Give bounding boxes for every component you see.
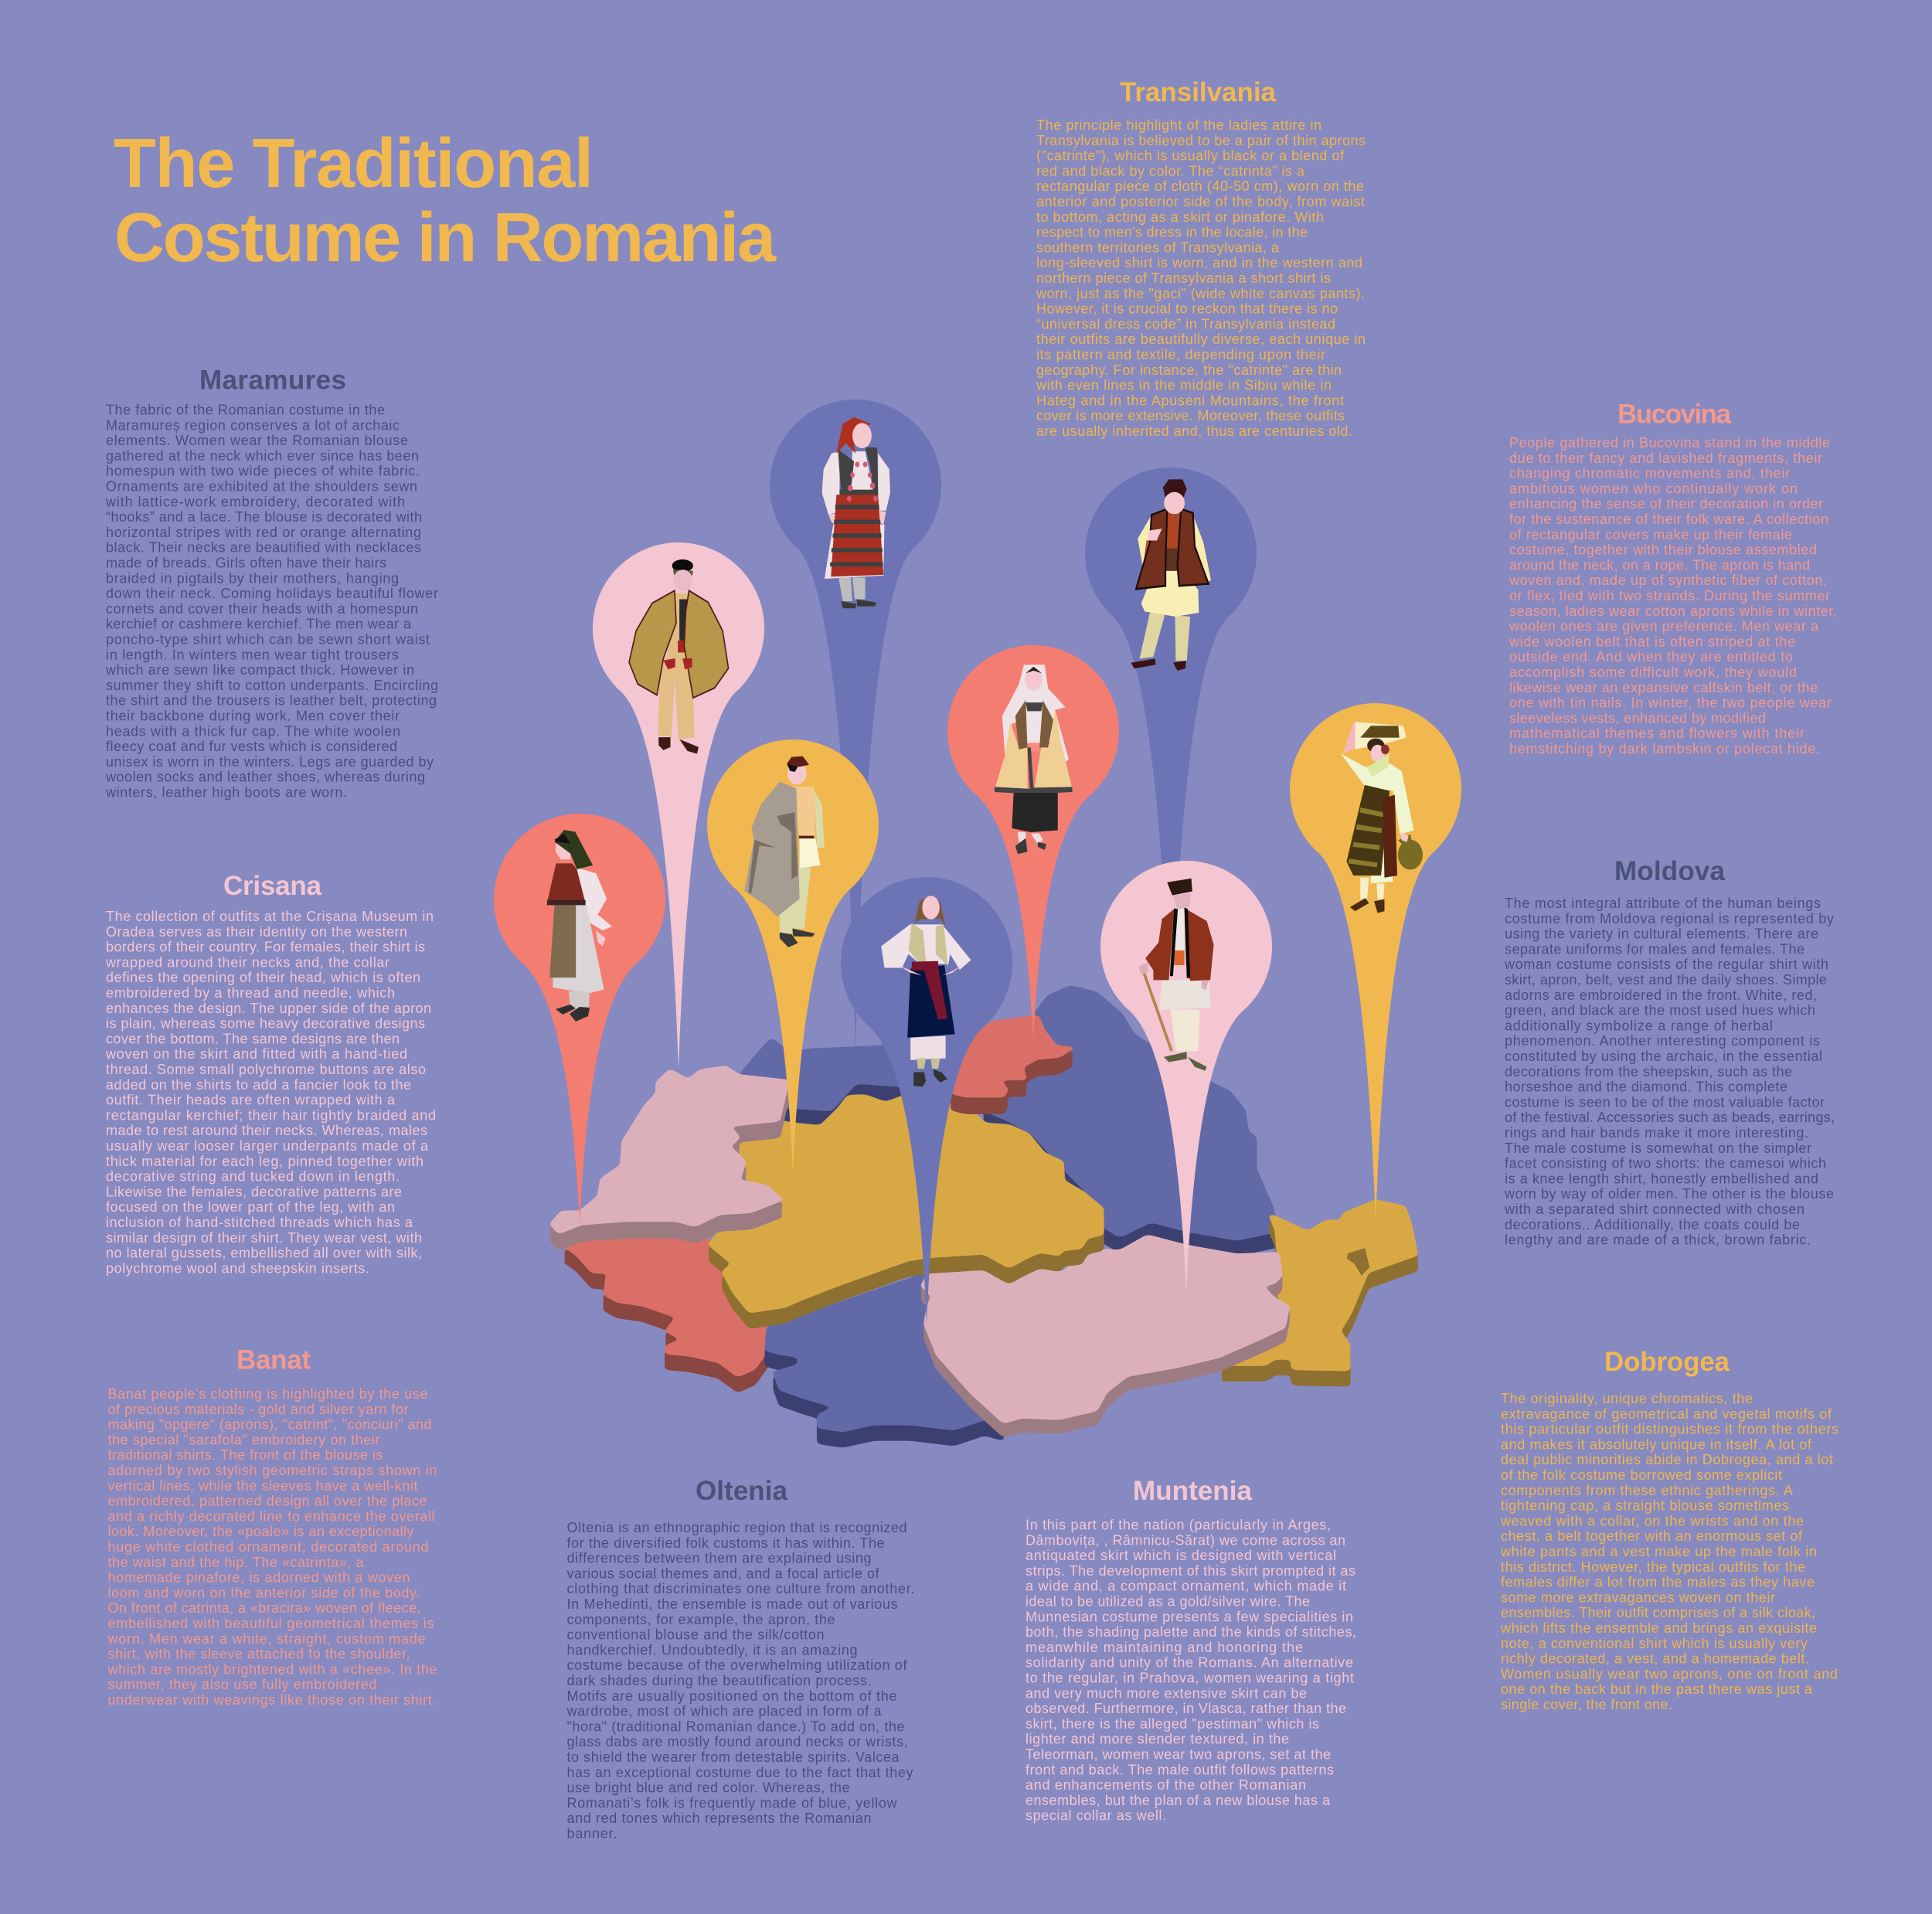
text block: Transilvania: ("catrinte"), which is usually black or a blend of: [1036, 148, 1345, 164]
text block: Moldova: The most integral attribute of the human beings: [1505, 896, 1821, 911]
figure: man with grey cloak: [744, 756, 825, 947]
panel: Crisana: [105, 871, 440, 1276]
text block: Banat: vertical lines, while the sleeves have a well-knit: [108, 1478, 417, 1494]
text block: Dobrogea: The originality, unique chromatics, the: [1501, 1391, 1753, 1406]
text block: Muntenia: solidarity and unity of the Romans. An alternative: [1026, 1655, 1353, 1671]
text block: Crisana: The collection of outfits at the Crișana Museum in: [106, 909, 434, 924]
pin: Moldova man: [1085, 467, 1257, 1056]
text block: Crisana: Oradea serves as their identity on the western: [106, 924, 407, 940]
text block: Maramures: winters, leather high boots are worn.: [105, 784, 347, 800]
text block: Maramures: fleecy coat and fur vests which is considered: [106, 739, 397, 754]
text block: Moldova: adorns are embroidered in the front. White, red,: [1505, 988, 1817, 1003]
text block: Maramures: braided in pigtails by their mothers, hanging: [106, 570, 399, 586]
text block: Oltenia: costume because of the overwhelming utilization of: [567, 1657, 907, 1673]
text block: Moldova: The male costume is somewhat on the simpler: [1505, 1141, 1811, 1156]
text block: Maramures: their backbone during work. Men cover their: [106, 708, 400, 723]
text block: Transilvania: Transylvania is believed to be a pair of thin aprons: [1036, 133, 1366, 148]
text block: Crisana: focused on the lower part of the leg, with an: [106, 1199, 395, 1215]
text block: Bucovina: People gathered in Bucovina stand in the middle: [1509, 435, 1830, 450]
text block: Banat: of precious materials - gold and silver yarn for: [108, 1402, 408, 1417]
region: Oltenia: [767, 1274, 1003, 1447]
figure: woman carrying bundle and jug: [1341, 722, 1423, 913]
text block: Maramures: gathered at the neck which ever since has been: [106, 448, 419, 464]
text block: Bucovina: mathematical themes and flowers with their: [1509, 726, 1804, 741]
text block: Maramures: heads with a thick fur cap. The white woolen: [106, 723, 400, 739]
text block: Banat: traditional shirts. The front of the blouse is: [108, 1447, 383, 1463]
title: The Traditional: [114, 125, 594, 202]
text block: Maramures: in length. In winters men wear tight trousers: [106, 647, 399, 662]
pin: Maramures man: [593, 542, 764, 1070]
panel: Maramures: [105, 365, 443, 800]
text block: Maramures: horizontal stripes with red or orange alternating: [106, 525, 421, 540]
text block: Transilvania: cover is more extensive. Moreover, these outfits: [1036, 408, 1345, 423]
panel: Banat: [107, 1345, 441, 1708]
text block: Oltenia: differences between them are explained using: [567, 1551, 872, 1566]
text block: Banat: shirt, with the sleeve attached to the shoulder,: [108, 1647, 410, 1662]
text block: Maramures: woolen socks and leather shoes, whereas during: [105, 770, 425, 785]
panel: Transilvania: [1036, 77, 1370, 439]
text block: Dobrogea: single cover, the front one.: [1501, 1697, 1672, 1712]
text block: Bucovina: woven and, made up of synthetic fiber of cotton,: [1509, 573, 1827, 588]
text block: Maramures: The fabric of the Romanian costume in the: [106, 402, 385, 417]
text block: Transilvania: with even lines in the middle in Sibiu while in: [1036, 378, 1332, 393]
text block: Bucovina: due to their fancy and lavished fragments, their: [1509, 450, 1822, 466]
text block: Banat: Banat people's clothing is highlighted by the use: [108, 1386, 428, 1402]
text block: Crisana: thread. Some small polychrome buttons are also: [106, 1062, 426, 1077]
text block: Crisana: decorative string and tucked down in length.: [106, 1169, 400, 1185]
text block: Dobrogea: of the folk costume borrowed some explicit: [1501, 1467, 1782, 1483]
text block: Oltenia: clothing that discriminates one culture from another.: [567, 1581, 915, 1596]
text block: Muntenia: meanwhile maintaining and honoring the: [1026, 1640, 1303, 1655]
text block: Banat: On front of catrinta, a «bracira» woven of fleece,: [108, 1600, 420, 1616]
text block: Bucovina: hemstitching by dark lambskin or polecat hide.: [1509, 741, 1820, 756]
text block: Transilvania: The principle highlight of the ladies attire in: [1036, 117, 1321, 133]
text block: Muntenia: Munnesian costume presents a few specialities in: [1026, 1609, 1353, 1624]
text block: Banat: and a richly decorated line to enhance the overall: [108, 1508, 434, 1524]
region: Dobrogea: [1222, 1201, 1416, 1385]
text block: Moldova: woman costume consists of the regular shirt with: [1504, 957, 1828, 972]
text block: Muntenia: antiquated skirt which is designed with vertical: [1026, 1548, 1336, 1563]
text block: Bucovina: woolen ones are given preference. Men wear a: [1509, 619, 1819, 634]
text block: Maramures: with lattice-work embroidery, decorated with: [105, 494, 405, 509]
text block: Bucovina: one with tin nails. In winter, the two people wear: [1509, 695, 1832, 711]
text block: Bucovina: season, ladies wear cotton aprons while in winter,: [1509, 603, 1837, 619]
text block: Crisana: borders of their country. For females, their shirt is: [106, 940, 425, 955]
text block: Crisana: is plain, whereas some heavy decorative designs: [106, 1016, 425, 1032]
text block: Dobrogea: this district. However, the typical outfits for the: [1501, 1559, 1805, 1575]
text block: Maramures: down their neck. Coming holidays beautiful flower: [106, 586, 438, 601]
text block: Crisana: Likewise the females, decorative patterns are: [106, 1184, 402, 1199]
region: Banat: [566, 1234, 769, 1391]
text block: Moldova: constituted by using the archaic, in the essential: [1505, 1049, 1822, 1064]
text block: Transilvania: “universal dress code” in Transylvania instead: [1036, 316, 1335, 331]
text block: Moldova: separate uniforms for males and females. The: [1505, 941, 1804, 957]
text block: Dobrogea: tightening cap, a straight blouse sometimes: [1501, 1498, 1789, 1514]
text block: Bucovina: outside end. And when they are entitled to: [1509, 649, 1793, 665]
text block: Maramures: summer they shift to cotton underpants. Encircling: [106, 678, 438, 693]
text block: Transilvania: rectangular piece of cloth (40-50 cm), worn on the: [1036, 178, 1364, 194]
text block: Moldova: costume from Moldova regional is represented by: [1505, 911, 1834, 926]
text block: Crisana: polychrome wool and sheepskin inserts.: [106, 1260, 369, 1276]
heading: Banat: Banat: [236, 1345, 311, 1375]
text block: Oltenia: Motifs are usually positioned on the bottom of the: [567, 1688, 896, 1704]
text block: Oltenia: In Mehedinti, the ensemble is made out of various: [567, 1596, 898, 1612]
text block: Bucovina: enhancing the sense of their decoration in order: [1509, 496, 1823, 512]
text block: Maramures: “hooks” and a lace. The blouse is decorated with: [106, 509, 422, 525]
text block: Oltenia: conventional blouse and the silk/cotton: [567, 1627, 824, 1643]
text block: Moldova: skirt, apron, belt, vest and the daily shoes. Simple: [1505, 972, 1827, 988]
text block: Dobrogea: which lifts the ensemble and brings an exquisite: [1500, 1620, 1817, 1636]
text block: Transilvania: long-sleeved shirt is worn, and in the western and: [1036, 255, 1362, 270]
text block: Oltenia: handkerchief. Undoubtedly, it is an amazing: [567, 1642, 858, 1657]
pin: Muntenia woman: [947, 645, 1119, 1040]
heading: Bucovina: Bucovina: [1617, 399, 1732, 430]
figure: woman with hands on hips: [881, 895, 971, 1086]
text block: Crisana: outfit. Their heads are often wrapped with a: [106, 1093, 396, 1108]
text block: Dobrogea: extravagance of geometrical and vegetal motifs of: [1501, 1406, 1832, 1422]
text block: Banat: making "opgere" (aprons), "catrint", "conciuri" and: [108, 1417, 431, 1433]
text block: Maramures: unisex is worn in the winters. Legs are guarded by: [106, 754, 434, 770]
text block: Crisana: made to rest around their necks. Whereas, males: [106, 1123, 427, 1138]
text block: Crisana: embroidered by a thread and needle, which: [106, 985, 395, 1001]
text block: Bucovina: sleeveless vests, enhanced by modified: [1509, 710, 1766, 726]
text block: Maramures: cornets and cover their heads with a homespun: [106, 601, 418, 617]
text block: Banat: which are mostly brightened with a «chee». In the: [107, 1661, 437, 1677]
text block: Banat: look. Moreover, the «poale» is an exceptionally: [108, 1524, 414, 1539]
text block: Moldova: is a knee length shirt, honestly embellished and: [1505, 1171, 1818, 1186]
text block: Moldova: costume is seen to be of the most valuable factor: [1505, 1094, 1825, 1110]
text block: Bucovina: wide woolen belt that is often striped at the: [1509, 634, 1795, 649]
text block: Banat: summer, they also use fully embroidered: [108, 1677, 377, 1692]
text block: Maramures: elements. Women wear the Romanian blouse: [106, 433, 408, 448]
text block: Muntenia: ideal to be utilized as a gold/silver wire. The: [1026, 1593, 1310, 1609]
text block: Muntenia: special collar as well.: [1026, 1808, 1166, 1824]
text block: Transilvania: anterior and posterior side of the body, from waist: [1036, 194, 1365, 209]
pin: Oltenia man: [707, 739, 879, 1174]
text block: Transilvania: northern piece of Transylvania a short shirt is: [1036, 270, 1331, 286]
heading: Muntenia: Muntenia: [1133, 1476, 1253, 1506]
map of Romania: [552, 987, 1416, 1447]
text block: Crisana: no lateral gussets, embellished all over with silk,: [106, 1246, 422, 1261]
text block: Crisana: usually wear looser larger underpants made of a: [106, 1138, 429, 1154]
text block: Moldova: with a separated shirt connected with chosen: [1504, 1202, 1804, 1217]
region: Maramures: [552, 1067, 787, 1249]
text block: Crisana: woven on the skirt and fitted with a hand-tied: [105, 1046, 407, 1062]
text block: Moldova: horseshoe and the diamond. This complete: [1505, 1079, 1787, 1095]
text block: Maramures: made of breads. Girls often have their hairs: [106, 555, 386, 570]
text block: Muntenia: Dâmbovița, , Râmnicu-Sărat) we come across an: [1026, 1532, 1345, 1548]
text block: Transilvania: However, it is crucial to reckon that there is no: [1036, 301, 1338, 317]
text block: Banat: the special "sarafola" embroidery on their: [108, 1432, 380, 1447]
text block: Transilvania: its pattern and textile, depending upon their: [1036, 347, 1325, 362]
text block: Moldova: decorations from the sheepskin, such as the: [1505, 1064, 1792, 1079]
text block: Transilvania: red and black by color. The “catrinta” is a: [1036, 163, 1305, 178]
text block: Muntenia: observed. Furthermore, in Vlasca, rather than the: [1026, 1701, 1346, 1716]
text block: Crisana: added on the shirts to add a fancier look to the: [106, 1077, 411, 1093]
text block: Oltenia: various social themes and, and a focal article of: [567, 1566, 879, 1581]
pin: Dobrogea woman: [1290, 703, 1461, 1224]
text block: Crisana: wrapped around their necks and, the collar: [105, 954, 389, 970]
text block: Oltenia: use bright blue and red color. Whereas, the: [567, 1780, 850, 1796]
text block: Bucovina: or flex, tied with two strands. During the summer: [1509, 588, 1830, 603]
text block: Dobrogea: some more extravagances woven on their: [1501, 1589, 1775, 1605]
text block: Dobrogea: note, a conventional shirt which is usually very: [1501, 1636, 1808, 1651]
text block: Bucovina: likewise wear an expansive calfskin belt, or the: [1509, 680, 1818, 695]
text block: Dobrogea: deal public minorities abide in Dobrogea, and a lot: [1501, 1452, 1833, 1467]
text block: Moldova: worn by way of older men. The other is the blouse: [1504, 1186, 1834, 1202]
heading: Dobrogea: Dobrogea: [1604, 1347, 1730, 1377]
text block: Muntenia: skirt, there is the alleged "pestiman" which is: [1026, 1716, 1319, 1732]
text block: Muntenia: ensembles, but the plan of a new blouse has a: [1026, 1793, 1331, 1808]
text block: Muntenia: In this part of the nation (particularly in Arges,: [1026, 1518, 1331, 1533]
title: [114, 125, 777, 277]
text block: Transilvania: are usually inherited and, thus are centuries old.: [1036, 423, 1352, 439]
figure: woman with green headscarf: [547, 830, 612, 1022]
pin: Transilvania woman: [770, 399, 941, 1049]
figure: man with staff: [1138, 879, 1214, 1071]
text block: Banat: homemade pinafore, is adorned with a woven: [108, 1570, 410, 1586]
heading: Moldova: Moldova: [1614, 856, 1726, 886]
text block: Banat: loom and worn on the anterior side of the body.: [108, 1585, 420, 1600]
region: Muntenia: [923, 1236, 1287, 1436]
text block: Dobrogea: this particular outfit distinguishes it from the others: [1501, 1422, 1838, 1437]
text block: Moldova: facet consisting of two shorts: the camesoi which: [1505, 1156, 1826, 1171]
text block: Muntenia: lighter and more slender textured, in the: [1026, 1732, 1289, 1747]
text block: Dobrogea: weaved with a collar, on the wrists and on the: [1500, 1513, 1804, 1528]
pin: Banat woman: [841, 877, 1012, 1324]
text block: Dobrogea: components from these ethnic gatherings. A: [1501, 1483, 1793, 1498]
text block: Dobrogea: richly decorated, a vest, and a homemade belt.: [1501, 1651, 1809, 1667]
text block: Transilvania: respect to men's dress in the locale, in the: [1036, 225, 1308, 240]
text block: Muntenia: and enhancements of the other Romanian: [1026, 1777, 1306, 1793]
title: Costume in Romania: [114, 199, 777, 277]
text block: Moldova: phenomenon. Another interesting component is: [1505, 1033, 1820, 1049]
text block: Banat: adorned by two stylish geometric straps shown in: [108, 1463, 437, 1478]
panel: Muntenia: [1026, 1476, 1361, 1824]
figure: man in fur cap and vest: [1131, 479, 1211, 671]
text block: Muntenia: front and back. The male outfit follows patterns: [1026, 1762, 1334, 1777]
text block: Maramures: which are sewn like compact thick. However in: [105, 662, 414, 678]
text block: Crisana: inclusion of hand-stitched threads which has a: [106, 1215, 413, 1230]
text block: Transilvania: Hateg and in the Apuseni Mountains, the front: [1036, 393, 1344, 408]
text block: Muntenia: to the regular, in Prahova, women wearing a tight: [1026, 1671, 1354, 1686]
text block: Transilvania: to bottom, acting as a skirt or pinafore. With: [1036, 209, 1324, 225]
heading: Transilvania: Transilvania: [1120, 77, 1277, 107]
text block: Crisana: rectangular kerchief; their hair tightly braided and: [106, 1107, 436, 1123]
text block: Moldova: lengthy and are made of a thick, brown fabric.: [1505, 1232, 1811, 1248]
panel: Dobrogea: [1500, 1347, 1843, 1712]
text block: Bucovina: of rectangular covers make up their female: [1509, 527, 1792, 542]
heading: Maramures: Maramures: [199, 365, 346, 396]
text block: Moldova: green, and black are the most used hues which: [1505, 1003, 1815, 1018]
text block: Maramures: Ornaments are exhibited at the shoulders sewn: [106, 479, 417, 495]
text block: Banat: underwear with weavings like those on their shirt.: [108, 1692, 436, 1708]
panel: Bucovina: [1509, 399, 1842, 756]
text block: Oltenia: Romanati’s folk is frequently made of blue, yellow: [567, 1795, 898, 1810]
text block: Banat: embroidered, patterned design all over the place: [108, 1494, 427, 1509]
text block: Banat: worn. Men wear a white, straight, custom made: [107, 1631, 425, 1647]
text block: Dobrogea: females differ a lot from the males as they have: [1501, 1575, 1815, 1590]
text block: Muntenia: a wide and, a compact ornament, which made it: [1026, 1579, 1346, 1594]
text block: Bucovina: around the neck, on a rope. The apron is hand: [1509, 557, 1810, 573]
text block: Crisana: similar design of their shirt. They wear vest, with: [106, 1230, 422, 1246]
figure: woman with white veil: [995, 665, 1072, 854]
text block: Moldova: of the festival. Accessories such as beads, earrings,: [1505, 1110, 1835, 1125]
text block: Dobrogea: chest, a belt together with an enormous set of: [1501, 1528, 1803, 1544]
text block: Banat: huge white clothed ornament, decorated around: [108, 1539, 428, 1555]
heading: Crisana: Crisana: [223, 871, 322, 901]
region: Transilvania: [710, 1096, 1101, 1328]
text block: Moldova: additionally symbolize a range of herbal: [1505, 1018, 1773, 1033]
text block: Oltenia: has an exceptional costume due to the fact that they: [567, 1765, 913, 1780]
text block: Bucovina: costume, together with their blouse assembled: [1509, 542, 1817, 558]
figure: woman in red scarf and striped apron: [822, 417, 890, 608]
text block: Oltenia: to shield the wearer from detestable spirits. Valcea: [567, 1749, 900, 1765]
text block: Crisana: enhances the design. The upper side of the apron: [106, 1001, 431, 1016]
text block: Banat: embellished with beautiful geometrical themes is: [108, 1616, 434, 1631]
text block: Crisana: cover the bottom. The same designs are then: [106, 1031, 400, 1046]
text block: Transilvania: southern territories of Transylvania, a: [1036, 240, 1280, 255]
text block: Crisana: defines the opening of their head, which is often: [106, 970, 420, 985]
text block: Muntenia: Teleorman, women wear two aprons, set at the: [1026, 1746, 1331, 1762]
text block: Maramures: poncho-type shirt which can be sewn short waist: [106, 632, 430, 648]
text block: Muntenia: and very much more extensive skirt can be: [1026, 1685, 1307, 1701]
text block: Transilvania: their outfits are beautifully diverse, each unique in: [1036, 331, 1366, 347]
pin: Bucovina man: [1100, 861, 1272, 1293]
text block: Muntenia: strips. The development of this skirt prompted it as: [1026, 1563, 1355, 1579]
region: Crisana: [952, 1016, 1072, 1113]
pin: Crisana woman: [494, 814, 665, 1224]
text block: Oltenia: banner.: [567, 1826, 617, 1841]
text block: Oltenia: dark shades during the beautification process.: [567, 1673, 872, 1688]
text block: Oltenia: wardrobe, most of which are placed in form of a: [566, 1704, 882, 1719]
text block: Moldova: using the variety in cultural elements. There are: [1505, 926, 1818, 942]
text block: Oltenia: Oltenia is an ethnographic region that is recognized: [567, 1520, 907, 1535]
heading: Oltenia: Oltenia: [696, 1476, 788, 1506]
text block: Bucovina: ambitious women who continually work on: [1509, 481, 1798, 496]
region: Moldova and Bucovina: [741, 987, 1277, 1255]
panel: Oltenia: [566, 1476, 919, 1841]
text block: Maramures: homespun with two wide pieces of white fabric.: [106, 464, 420, 479]
text block: Transilvania: worn, just as the "gaci" (wide white canvas pants).: [1036, 286, 1365, 301]
text block: Dobrogea: white pants and a vest make up the male folk in: [1500, 1544, 1817, 1559]
text block: Oltenia: glass dabs are mostly found around necks or wrists,: [567, 1734, 907, 1749]
text block: Bucovina: changing chromatic movements and, their: [1509, 466, 1790, 481]
text block: Dobrogea: and makes it absolutely unique in itself. A lot of: [1501, 1436, 1812, 1452]
text block: Dobrogea: one on the back but in the past there was just a: [1501, 1681, 1813, 1697]
text block: Muntenia: both, the shading palette and the kinds of stitches,: [1026, 1624, 1356, 1640]
text block: Dobrogea: Women usually wear two aprons, one on front and: [1501, 1666, 1838, 1681]
text block: Oltenia: "hora" (traditional Romanian dance.) To add on, the: [567, 1719, 904, 1734]
text block: Banat: the waist and the hip. The «catrinta», a: [108, 1555, 364, 1570]
text block: Crisana: thick material for each leg, pinned together with: [106, 1154, 423, 1169]
text block: Maramures: black. Their necks are beautified with necklaces: [106, 540, 421, 556]
text block: Bucovina: for the sustenance of their folk ware. A collection: [1509, 512, 1828, 527]
figure: man in tan coat: [629, 559, 729, 754]
text block: Oltenia: components, for example, the apron, the: [567, 1612, 835, 1627]
text block: Maramures: the shirt and the trousers is leather belt, protecting: [106, 693, 437, 709]
text block: Dobrogea: ensembles. Their outfit comprises of a silk cloak,: [1501, 1605, 1815, 1620]
text block: Oltenia: for the diversified folk customs it has within. The: [567, 1535, 884, 1551]
text block: Moldova: decorations.. Additionally, the coats could be: [1505, 1217, 1800, 1232]
text block: Oltenia: and red tones which represents the Romanian: [567, 1810, 872, 1826]
text block: Maramures: kerchief or cashmere kerchief. The men wear a: [106, 617, 412, 632]
text block: Transilvania: geography. For instance, the "catrinte" are thin: [1036, 362, 1342, 378]
text block: Bucovina: accomplish some difficult work, they would: [1509, 665, 1797, 680]
text block: Maramures: Maramureș region conserves a lot of archaic: [106, 417, 400, 433]
panel: Moldova: [1504, 856, 1838, 1248]
text block: Moldova: rings and hair bands make it more interesting.: [1505, 1125, 1808, 1141]
